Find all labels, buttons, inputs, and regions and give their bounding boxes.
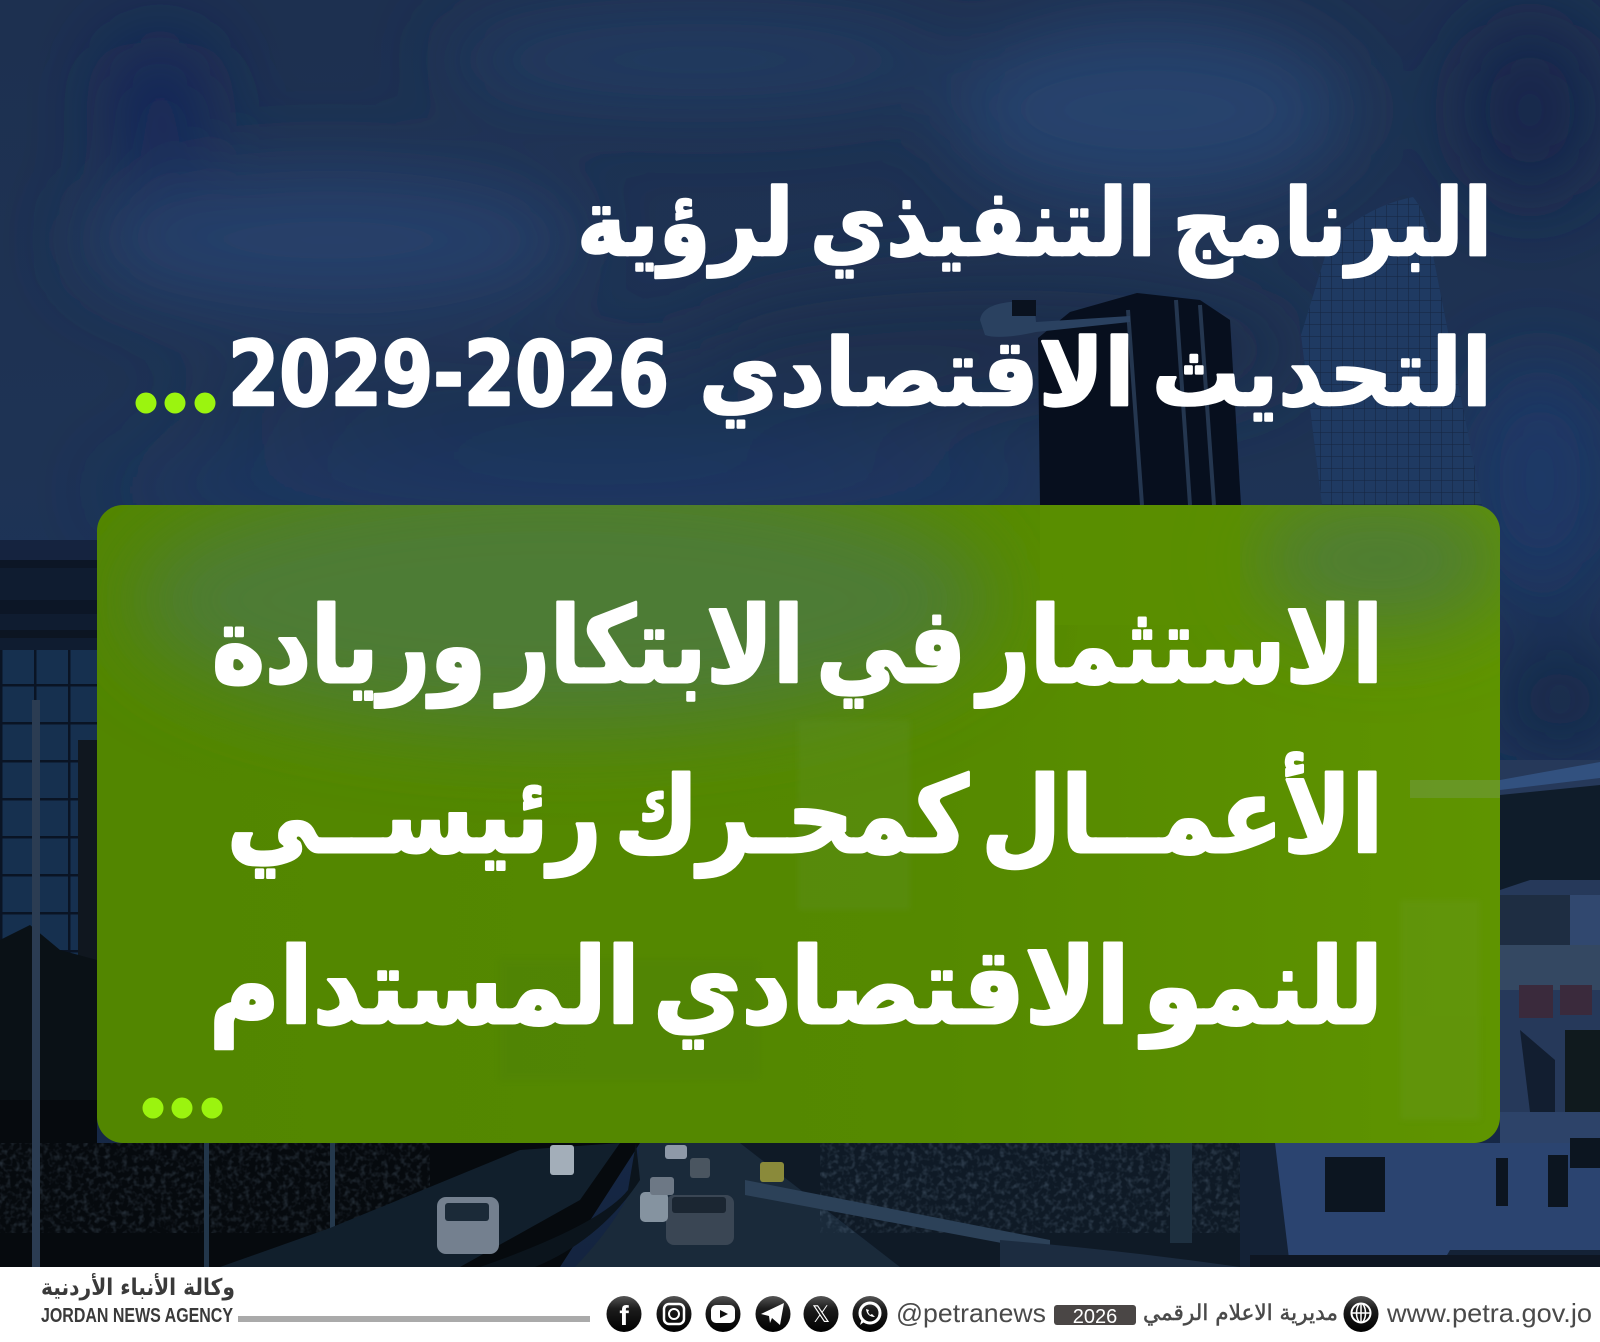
panel line 3: للنمو الاقتصادي المستدام	[209, 926, 1383, 1049]
panel ellipsis dots	[142, 1098, 222, 1118]
trees at bottom left	[0, 700, 640, 1267]
icon: instagram	[656, 1296, 692, 1332]
green message panel	[97, 470, 1510, 1143]
footer	[0, 1267, 1600, 1342]
icon: facebook: f	[619, 1300, 629, 1331]
agency name: وكالة الأنباء الأردنية	[41, 1272, 235, 1301]
agency name	[41, 1272, 235, 1327]
panel line 1: الاستثمار في الابتكار وريادة	[212, 585, 1383, 708]
title line 1: البرنامج التنفيذي لرؤية	[577, 169, 1492, 278]
icon: youtube	[706, 1296, 740, 1332]
agency name: JORDAN NEWS AGENCY	[41, 1305, 234, 1327]
main title	[228, 169, 1492, 428]
website: www.petra.gov.jo	[1386, 1298, 1592, 1328]
dark office tower	[1038, 293, 1241, 505]
icon: X	[804, 1296, 838, 1332]
title ellipsis dots	[136, 392, 216, 414]
icon: telegram	[756, 1296, 790, 1332]
icon: globe	[1344, 1296, 1378, 1332]
panel text	[209, 585, 1383, 1049]
round glass tower	[1301, 197, 1482, 505]
social handle: @petranews	[896, 1298, 1046, 1328]
year badge: 2026	[1073, 1306, 1117, 1328]
icon: facebook	[606, 1296, 642, 1332]
bottom roads and cars	[220, 1143, 1250, 1267]
year badge	[1054, 1305, 1136, 1328]
panel texture	[130, 470, 1510, 1120]
right building	[1240, 760, 1600, 1267]
title line 2: التحديث الاقتصادي	[699, 319, 1492, 428]
icon: whatsapp	[852, 1296, 888, 1332]
panel line 2: الأعمــال كمحـرك رئيســي	[227, 752, 1383, 878]
department name: مديرية الاعلام الرقمي	[1143, 1301, 1338, 1326]
icon: X: 𝕏	[812, 1301, 830, 1327]
street lamp	[980, 300, 1130, 337]
left building	[0, 540, 97, 990]
title years: 2029-2026	[228, 322, 669, 426]
footer rule	[238, 1316, 590, 1322]
